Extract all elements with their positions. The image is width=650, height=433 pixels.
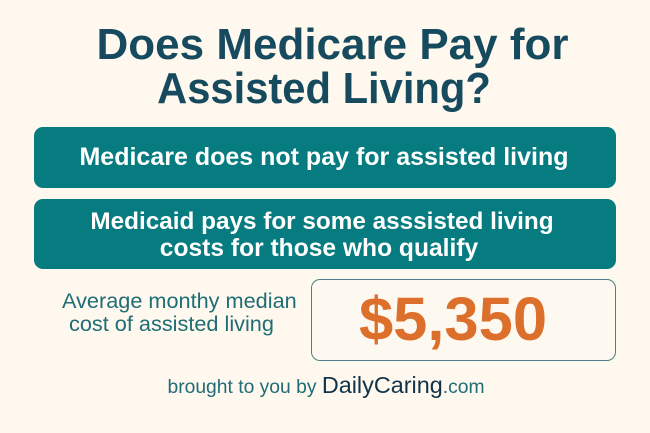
title: Does Medicare Pay for	[97, 20, 568, 69]
footer credit: brought to you by DailyCaring.com	[167, 372, 485, 398]
medicaid statement text: costs for those who qualify	[160, 235, 478, 262]
medicaid statement text: Medicaid pays for some asssisted living	[90, 208, 554, 235]
title	[97, 20, 568, 113]
medicaid statement text	[90, 208, 554, 262]
cost label	[62, 288, 297, 336]
medicare statement text: Medicare does not pay for assisted living	[79, 143, 569, 171]
panel: medicare statement	[34, 127, 616, 188]
cost figure: $5,350	[359, 285, 547, 354]
panel: medicaid statement	[34, 199, 616, 269]
panel: cost value	[311, 279, 616, 361]
cost label: cost of assisted living	[69, 311, 274, 336]
title: Assisted Living?	[157, 64, 491, 113]
cost label: Average monthy median	[62, 288, 297, 313]
